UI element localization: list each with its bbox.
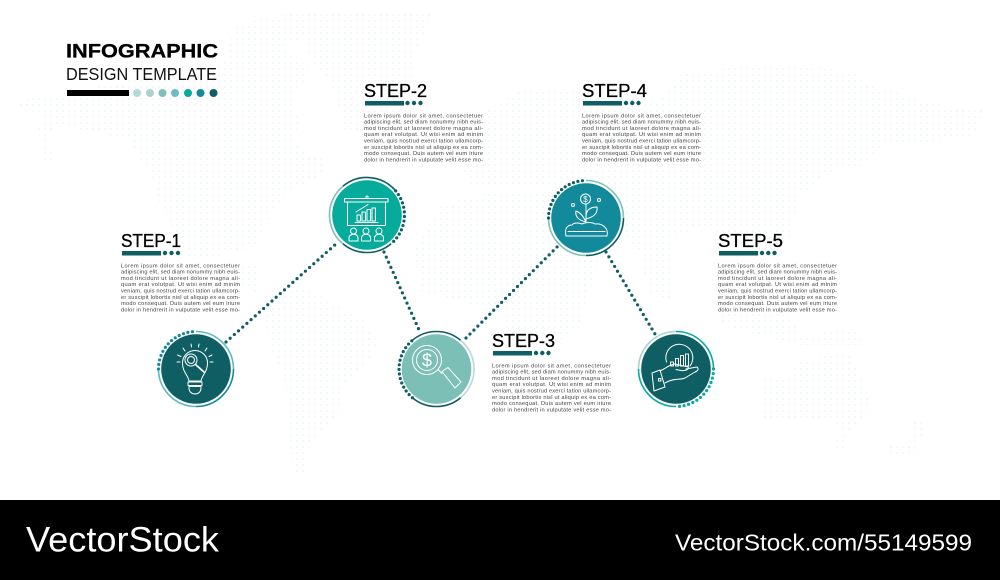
step 5 text block bbox=[718, 231, 837, 313]
icon: plant growing a coin: $ bbox=[583, 195, 588, 204]
step 5 heading: STEP-5 bbox=[718, 231, 783, 251]
dotted connectors bbox=[226, 243, 655, 342]
step 4 body: Lorem ipsum dolor sit amet, consectetuer bbox=[582, 113, 701, 119]
footer bar bbox=[0, 500, 1000, 580]
step 4 text block bbox=[582, 81, 701, 163]
step 2 body: Lorem ipsum dolor sit amet, consectetuer bbox=[364, 113, 483, 119]
step 3 body: quam erat volutpat. Ut wisi enim ad minim bbox=[492, 382, 611, 388]
step 4 body: mod tincidunt ut laoreet dolore magna ali- bbox=[582, 126, 701, 132]
step 2 circle bbox=[314, 162, 420, 268]
step 5 body: modo consequat. Duis autem vel eum iriure bbox=[718, 301, 837, 307]
step 2 body: veniam, quis nostrud exerci tation ullamcorp- bbox=[364, 138, 483, 144]
step 2 body bbox=[364, 113, 483, 163]
step 5 body bbox=[718, 263, 837, 313]
footer url: VectorStock.com/55149599 bbox=[675, 530, 972, 556]
step 3 body: Lorem ipsum dolor sit amet, consectetuer bbox=[492, 363, 611, 369]
step 3 body bbox=[492, 363, 611, 413]
step 1 rule bbox=[122, 251, 180, 256]
icon: hand holding growth chart bbox=[652, 344, 698, 391]
step 4 body: quam erat volutpat. Ut wisi enim ad minim bbox=[582, 132, 701, 138]
step 5 body: er suscipit lobortis nisl ut aliquip ex ea com- bbox=[718, 295, 837, 301]
step 5 circle bbox=[638, 332, 714, 406]
footer brand: VectorStock bbox=[26, 520, 220, 560]
step 5 body: mod tincidunt ut laoreet dolore magna ali- bbox=[718, 276, 837, 282]
step 5 body: dolor in hendrerit in vulputate velit esse mo- bbox=[718, 307, 837, 313]
step 2 body: adipiscing elit, sed diam nonummy nibh euis- bbox=[364, 120, 483, 126]
step 1 body: modo consequat. Duis autem vel eum iriure bbox=[121, 301, 240, 307]
step 4 body bbox=[582, 113, 701, 163]
icon: light bulb with magnifier bbox=[177, 344, 213, 394]
step 1 body: quam erat volutpat. Ut wisi enim ad minim bbox=[121, 282, 240, 288]
step 1 heading: STEP-1 bbox=[121, 231, 181, 251]
step 2 rule bbox=[365, 101, 423, 106]
step 1 body: dolor in hendrerit in vulputate velit esse mo- bbox=[121, 307, 240, 313]
step 3 body: modo consequat. Duis autem vel eum iriure bbox=[492, 401, 611, 407]
step 5 body: adipiscing elit, sed diam nonummy nibh euis- bbox=[718, 270, 837, 276]
step 4 body: adipiscing elit, sed diam nonummy nibh euis- bbox=[582, 120, 701, 126]
title: infographic: INFOGRAPHIC bbox=[66, 42, 218, 62]
step 3 rule bbox=[493, 351, 551, 356]
step 3 body: dolor in hendrerit in vulputate velit esse mo- bbox=[492, 407, 611, 413]
step 4 circle bbox=[548, 180, 624, 256]
step 1 circle bbox=[158, 332, 234, 406]
step 3 circle bbox=[384, 316, 489, 422]
step 3 body: er suscipit lobortis nisl ut aliquip ex ea com- bbox=[492, 395, 611, 401]
step 3 body: adipiscing elit, sed diam nonummy nibh euis- bbox=[492, 370, 611, 376]
title rule and colour dots bbox=[67, 89, 218, 97]
step 5 body: Lorem ipsum dolor sit amet, consectetuer bbox=[718, 263, 837, 269]
step 4 rule bbox=[583, 101, 641, 106]
icon: presentation board with audience bbox=[344, 196, 388, 241]
step 1 body: adipiscing elit, sed diam nonummy nibh euis- bbox=[121, 270, 240, 276]
title block bbox=[66, 42, 218, 97]
step 4 body: veniam, quis nostrud exerci tation ullamcorp- bbox=[582, 138, 701, 144]
step 2 body: dolor in hendrerit in vulputate velit esse mo- bbox=[364, 157, 483, 163]
subtitle: design template: DESIGN TEMPLATE bbox=[66, 64, 217, 84]
dotted world map background bbox=[18, 10, 985, 472]
step 1 body: Lorem ipsum dolor sit amet, consectetuer bbox=[121, 263, 240, 269]
step 2 body: er suscipit lobortis nisl ut aliquip ex ea com- bbox=[364, 145, 483, 151]
step 4 heading: STEP-4 bbox=[582, 81, 647, 101]
step 4 body: dolor in hendrerit in vulputate velit esse mo- bbox=[582, 157, 701, 163]
step 5 rule bbox=[719, 251, 777, 256]
step 1 text block bbox=[121, 231, 240, 313]
step 1 body bbox=[121, 263, 240, 313]
step 4 body: modo consequat. Duis autem vel eum iriure bbox=[582, 151, 701, 157]
step 2 heading: STEP-2 bbox=[364, 81, 427, 101]
step 5 body: veniam, quis nostrud exerci tation ullamcorp- bbox=[718, 288, 837, 294]
step 2 body: modo consequat. Duis autem vel eum iriure bbox=[364, 151, 483, 157]
step 1 body: er suscipit lobortis nisl ut aliquip ex ea com- bbox=[121, 295, 240, 301]
step 4 body: er suscipit lobortis nisl ut aliquip ex ea com- bbox=[582, 145, 701, 151]
step 3 body: veniam, quis nostrud exerci tation ullamcorp- bbox=[492, 388, 611, 394]
icon: magnifier with dollar: $ bbox=[422, 350, 432, 370]
step 1 body: veniam, quis nostrud exerci tation ullamcorp- bbox=[121, 288, 240, 294]
step 1 body: mod tincidunt ut laoreet dolore magna ali- bbox=[121, 276, 240, 282]
step 2 body: quam erat volutpat. Ut wisi enim ad minim bbox=[364, 132, 483, 138]
step 2 body: mod tincidunt ut laoreet dolore magna ali- bbox=[364, 126, 483, 132]
step 5 body: quam erat volutpat. Ut wisi enim ad minim bbox=[718, 282, 837, 288]
step 3 heading: STEP-3 bbox=[492, 331, 555, 351]
step 2 text block bbox=[364, 81, 483, 163]
step 3 body: mod tincidunt ut laoreet dolore magna ali- bbox=[492, 376, 611, 382]
step 3 text block bbox=[492, 331, 611, 413]
